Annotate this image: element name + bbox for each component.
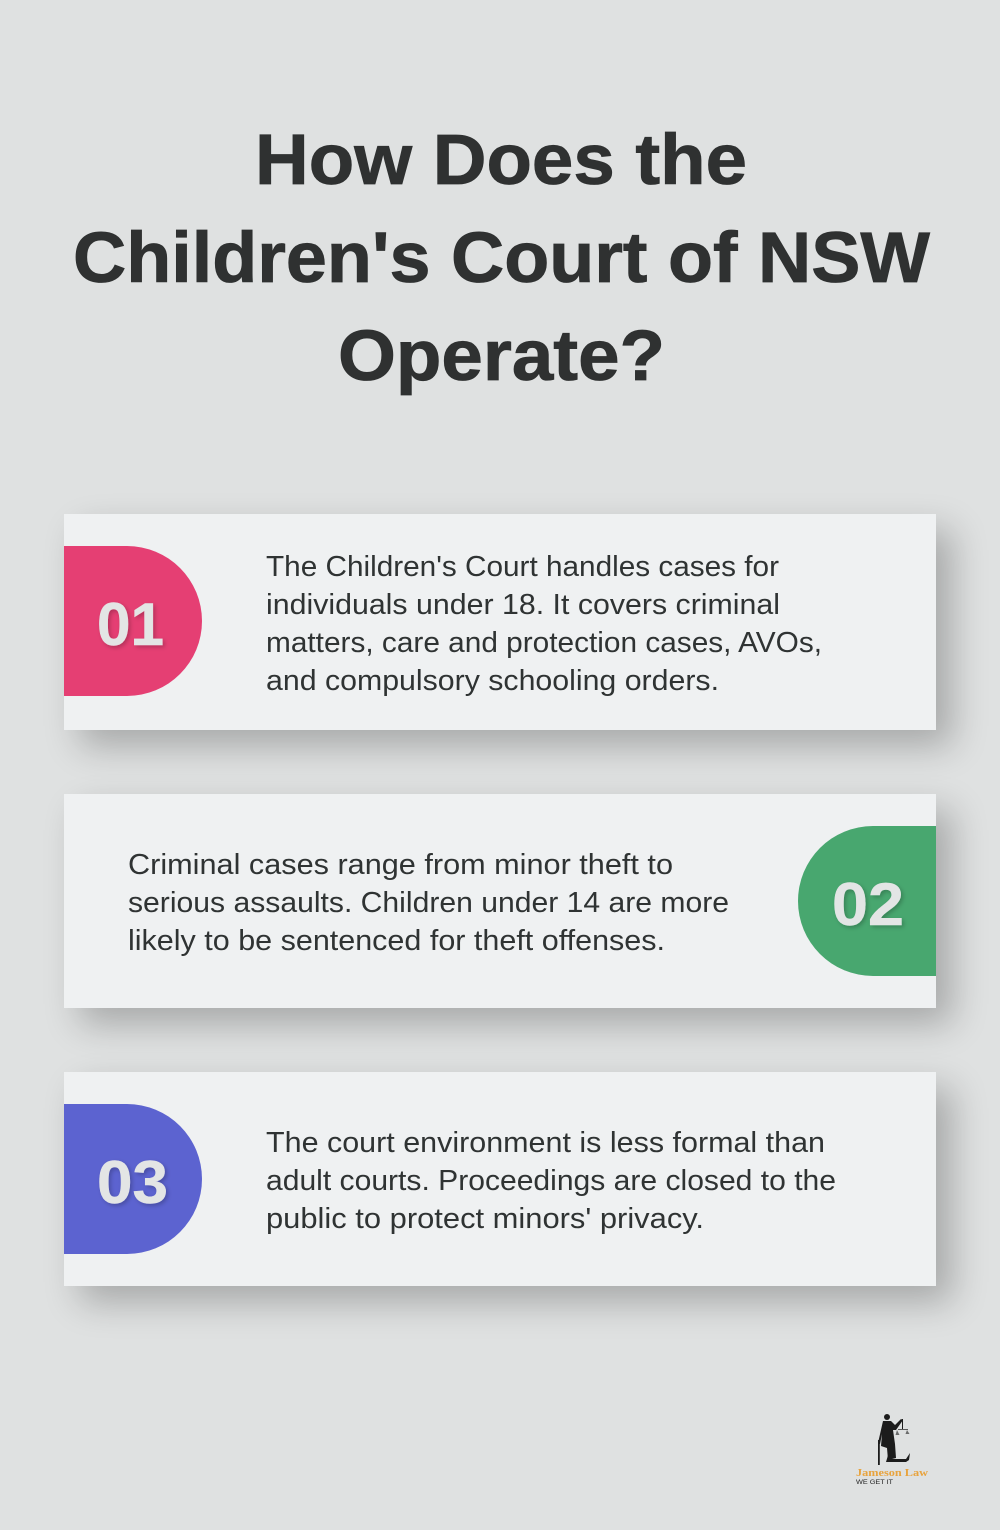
text: step 02 description: Criminal cases range from minor theft to — [128, 849, 673, 881]
panel: step 02 — [64, 794, 952, 1024]
logo: Jameson Law — [856, 1414, 928, 1486]
badge: 03: 03 — [97, 1149, 168, 1216]
badge: 01 — [64, 546, 202, 696]
title: Operate? — [338, 317, 665, 396]
text: step 01 description: and compulsory schooling orders. — [266, 665, 719, 697]
text: step 02 description: likely to be sentenced for theft offenses. — [128, 925, 665, 957]
text: step 03 description: The court environment is less formal than — [266, 1127, 825, 1159]
text: step 03 description: adult courts. Proceedings are closed to the — [266, 1165, 836, 1197]
badge: 02: 02 — [832, 871, 904, 938]
badge: 02 — [798, 826, 936, 976]
badge: 03 — [64, 1104, 202, 1254]
title: Children's Court of NSW — [73, 219, 930, 298]
text: brand name: Jameson Law — [856, 1467, 928, 1479]
panel: step 03 — [64, 1072, 952, 1302]
title — [73, 121, 930, 396]
text: tagline: WE GET IT — [856, 1479, 893, 1486]
badge: 01: 01 — [97, 591, 164, 658]
panel: step 01 — [64, 514, 952, 746]
text: step 03 description: public to protect minors' privacy. — [266, 1203, 704, 1235]
text: step 01 description: matters, care and protection cases, AVOs, — [266, 627, 822, 659]
title: How Does the — [255, 121, 747, 200]
text: step 01 description — [266, 551, 822, 697]
icon: lady justice with scales — [878, 1414, 910, 1465]
text: step 01 description: The Children's Court handles cases for — [266, 551, 779, 583]
text: step 02 description: serious assaults. Children under 14 are more — [128, 887, 729, 919]
text: step 03 description — [266, 1127, 836, 1235]
text: step 02 description — [128, 849, 729, 957]
text: step 01 description: individuals under 18. It covers criminal — [266, 589, 780, 621]
